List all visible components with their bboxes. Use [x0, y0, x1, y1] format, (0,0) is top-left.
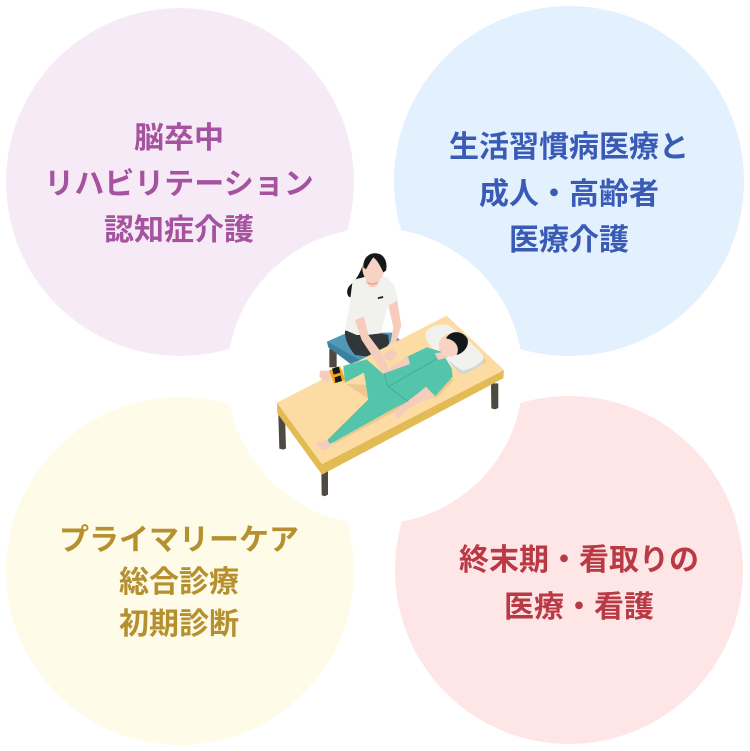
text: primary care	[59, 524, 299, 641]
illustration: therapist treating patient on a table	[277, 253, 504, 496]
text: stroke rehabilitation: リハビリテーション	[44, 168, 314, 201]
therapist	[345, 253, 401, 361]
text: lifestyle diseases	[449, 131, 689, 257]
patient	[316, 317, 468, 451]
center white circle	[227, 228, 523, 524]
text: lifestyle diseases: 成人・高齢者	[479, 178, 659, 210]
table	[277, 316, 504, 496]
text: primary care: 初期診断	[119, 608, 239, 641]
text: primary care: 総合診療	[119, 566, 239, 599]
circle: pink	[6, 8, 354, 356]
text: end of life care	[459, 544, 699, 624]
text: stroke rehabilitation: 脳卒中	[134, 122, 224, 155]
text: end of life care: 医療・看護	[504, 591, 654, 624]
text: lifestyle diseases: 医療介護	[509, 224, 629, 257]
stool	[327, 333, 400, 367]
text: primary care: プライマリーケア	[59, 524, 299, 557]
circle: blue	[394, 6, 744, 356]
text: stroke rehabilitation	[44, 122, 314, 247]
circle: yellow	[6, 397, 354, 745]
circle: red	[395, 396, 743, 744]
text: stroke rehabilitation: 認知症介護	[104, 214, 254, 247]
text: end of life care: 終末期・看取りの	[459, 544, 699, 577]
pillow	[425, 325, 486, 375]
text: lifestyle diseases: 生活習慣病医療と	[449, 131, 689, 164]
